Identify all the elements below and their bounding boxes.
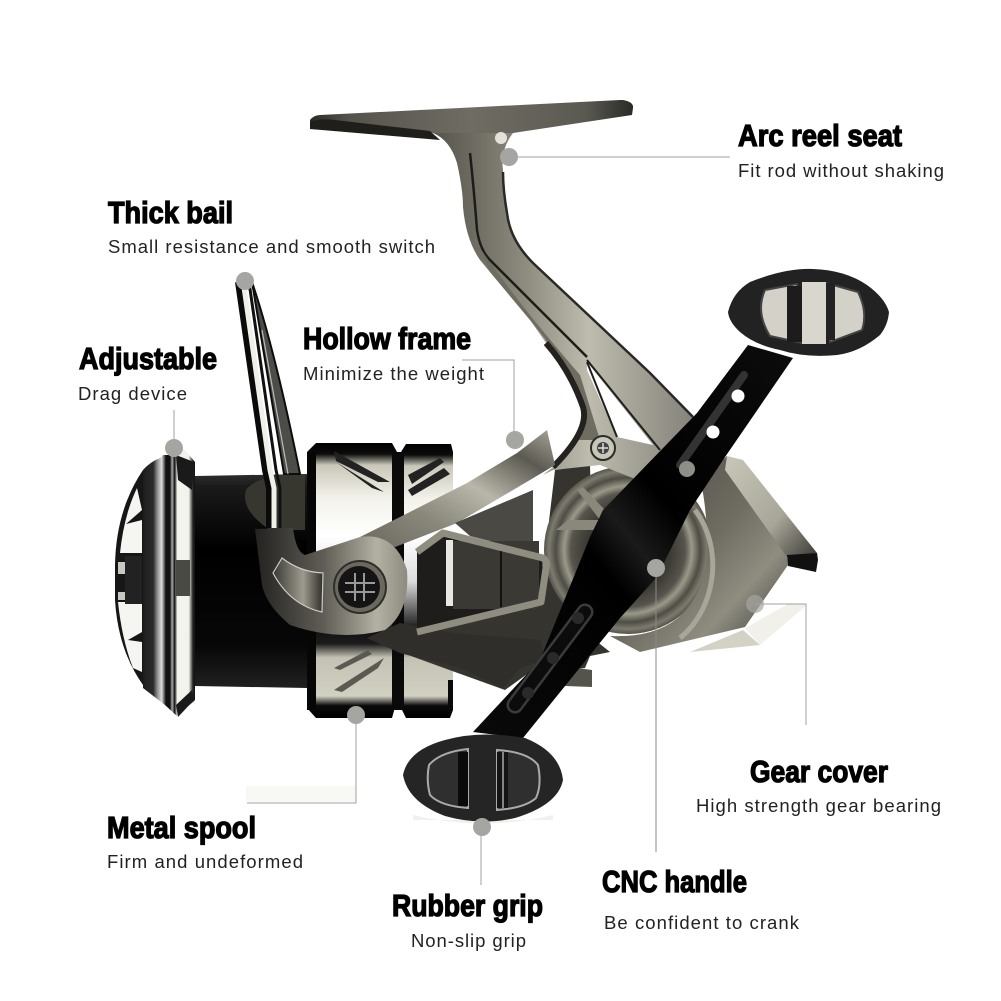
callout: gear cover <box>696 754 941 816</box>
callout: hollow frame: Minimize the weight <box>303 363 484 384</box>
callout: hollow frame <box>303 321 484 384</box>
bail arm <box>255 528 407 635</box>
leader line: rubber grip <box>480 827 482 885</box>
leader line: metal spool <box>247 715 356 803</box>
hollow frame window <box>417 490 547 632</box>
arc reel seat plate <box>310 100 633 133</box>
seat plate underside edge <box>310 119 440 140</box>
leader line: arc reel seat <box>509 156 730 158</box>
floor reflection <box>246 786 553 824</box>
callout: CNC handle: Be confident to crank <box>604 912 800 933</box>
rotor ring <box>544 466 712 634</box>
callout: metal spool: Metal spool <box>107 810 256 845</box>
callout: gear cover: High strength gear bearing <box>696 795 941 816</box>
gear cover <box>610 456 818 652</box>
thick bail wire <box>238 280 300 528</box>
callout: hollow frame: Hollow frame <box>303 321 471 356</box>
hollow frame lower arm <box>367 623 545 688</box>
spool front flange <box>115 449 195 717</box>
frame screw <box>591 436 615 460</box>
marker dots <box>165 148 764 836</box>
callout: adjustable: Adjustable <box>79 341 217 376</box>
line roller bulge <box>245 475 305 530</box>
gear foot <box>565 668 592 687</box>
frame stem <box>433 132 693 485</box>
callout: CNC handle: CNC handle <box>602 864 747 899</box>
leader line: adjustable <box>173 410 175 448</box>
lower reel body <box>400 465 610 690</box>
callout: arc reel seat: Fit rod without shaking <box>738 160 944 181</box>
leader line: hollow frame <box>462 360 514 440</box>
reel illustration <box>115 100 889 822</box>
callout: metal spool: Firm and undeformed <box>107 851 303 872</box>
metal spool upper and lower drums <box>307 443 453 718</box>
hollow frame upper arm <box>360 430 555 547</box>
callout: arc reel seat <box>738 118 944 181</box>
lower rubber knob <box>403 734 563 822</box>
callout: thick bail: Small resistance and smooth switch <box>108 236 435 257</box>
callout: rubber grip: Non-slip grip <box>411 930 526 951</box>
spool black cylinder <box>195 474 307 688</box>
leader line: CNC handle <box>655 568 657 852</box>
handle arm <box>473 345 793 738</box>
callout: rubber grip <box>392 888 543 951</box>
callout: rubber grip: Rubber grip <box>392 888 543 923</box>
callout: arc reel seat: Arc reel seat <box>738 118 902 153</box>
callout: thick bail: Thick bail <box>108 195 233 230</box>
callout: adjustable <box>78 341 217 404</box>
callout: metal spool <box>107 810 303 872</box>
callout: adjustable: Drag device <box>78 383 187 404</box>
upper rubber knob <box>728 269 889 356</box>
callout: thick bail <box>108 195 435 257</box>
callout: gear cover: Gear cover <box>750 754 888 789</box>
leader line: gear cover <box>755 604 806 725</box>
callout: CNC handle <box>602 864 800 933</box>
